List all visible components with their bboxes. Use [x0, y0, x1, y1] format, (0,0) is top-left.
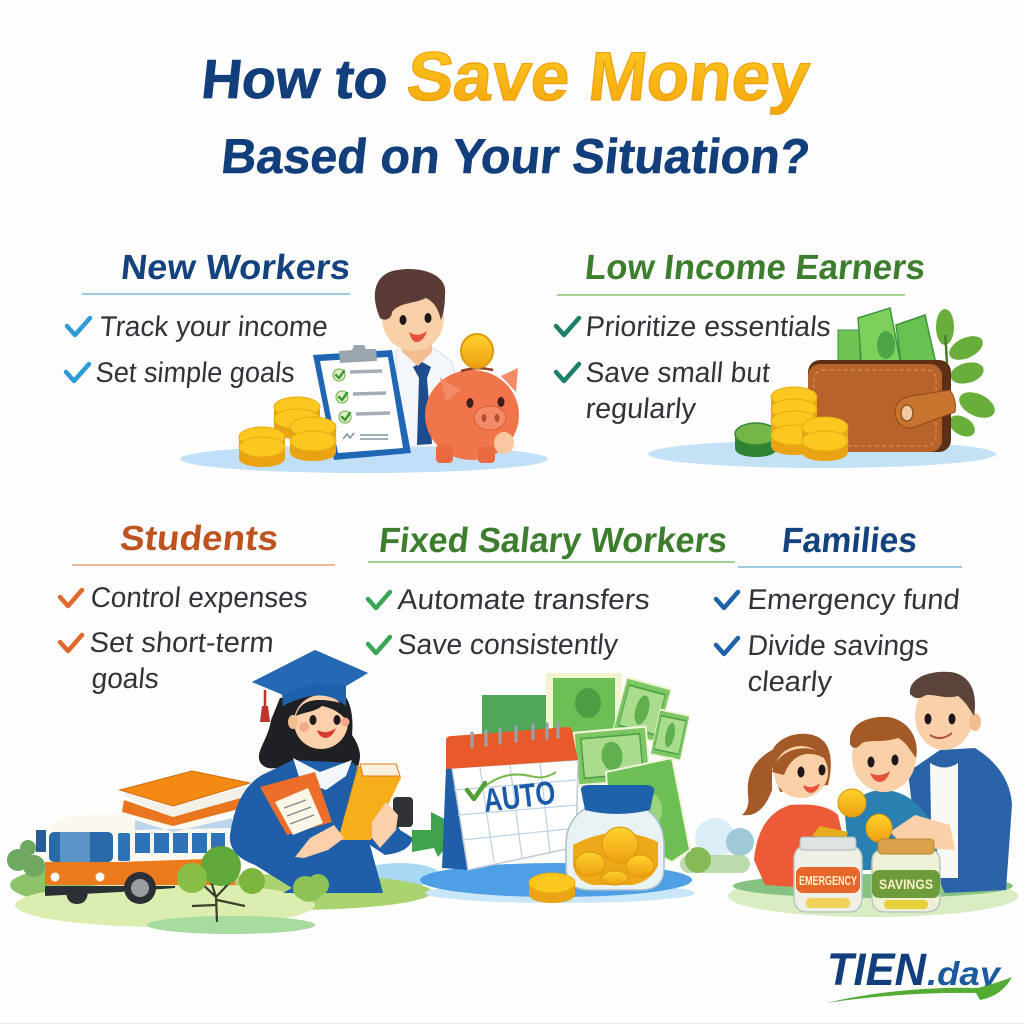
- books held: [260, 772, 332, 835]
- tips: low income earners: Prioritize essentials: [584, 311, 832, 343]
- emergency jar: [794, 826, 862, 912]
- bush: [293, 876, 317, 900]
- heading: low income earners: Low Income Earners: [583, 248, 927, 287]
- wallet: [808, 360, 955, 452]
- title: [199, 37, 814, 184]
- tips: new workers: [66, 311, 329, 389]
- panel: families: [716, 521, 1018, 917]
- calendar label: AUTO: [481, 773, 557, 819]
- heading: students: Students: [118, 519, 280, 558]
- savings jar: SAVINGS: [879, 876, 933, 892]
- cash: [482, 673, 690, 862]
- tips: low income earners: Save small but: [584, 357, 771, 389]
- illustration: family saving in jars: [728, 672, 1018, 917]
- loose coin: [529, 873, 575, 903]
- heading: new workers: New Workers: [119, 248, 352, 287]
- calendar: [442, 723, 578, 870]
- piggy bank: [425, 334, 519, 463]
- robe: [230, 760, 413, 893]
- boy: [838, 717, 955, 870]
- tips: students: [60, 582, 309, 695]
- panel: students: [7, 519, 440, 934]
- bus: [36, 813, 235, 904]
- tips: students: Set short-term: [88, 627, 275, 659]
- logo: [826, 944, 1012, 1003]
- tips: fixed salary workers: Save consistently: [396, 629, 620, 661]
- background shrubs: [680, 818, 754, 873]
- tips: students: goals: [90, 663, 160, 695]
- tips: low income earners: regularly: [584, 393, 698, 425]
- logo: TIEN: [827, 944, 927, 995]
- clipboard: [313, 345, 411, 460]
- panel: new workers: [66, 248, 548, 473]
- father's hand and coin: [890, 815, 955, 850]
- logo: .day: [927, 955, 1002, 992]
- tips: families: [716, 584, 961, 698]
- illustration: wallet with cash: [648, 308, 999, 468]
- tips: new workers: Track your income: [98, 311, 329, 343]
- cash: [838, 308, 937, 372]
- emergency jar: EMERGENCY: [799, 873, 857, 888]
- title line 1: [199, 37, 814, 115]
- tips: new workers: Set simple goals: [94, 357, 296, 389]
- title line 1: Save Money: [403, 37, 814, 115]
- arrow: [412, 812, 462, 857]
- stacked books: [120, 771, 250, 832]
- bushes: [7, 840, 45, 877]
- jar of coins: [566, 785, 664, 890]
- tips: fixed salary workers: [368, 584, 651, 661]
- cap: [252, 650, 368, 706]
- tree: [177, 846, 323, 922]
- illustration: automatic savings calendar and jar: [412, 673, 754, 903]
- leaves: [936, 309, 999, 441]
- panel: low income earners: [556, 248, 999, 468]
- tips: families: Emergency fund: [746, 584, 961, 616]
- graduate: [230, 650, 413, 900]
- title line 2: Based on Your Situation?: [219, 130, 813, 184]
- illustration: student, books and bus: [7, 650, 440, 934]
- hair back: [259, 692, 360, 768]
- coin stacks: [239, 397, 336, 467]
- heading: families: Families: [780, 521, 919, 560]
- savings jar: [872, 839, 940, 912]
- father: [908, 672, 1012, 893]
- hands: [295, 825, 344, 858]
- panel: fixed salary workers: [368, 521, 754, 903]
- illustration: worker with piggy bank: [180, 269, 548, 473]
- worker: [375, 269, 460, 447]
- girl: [742, 734, 846, 887]
- tips: families: clearly: [746, 666, 834, 698]
- tips: fixed salary workers: Automate transfers: [396, 584, 651, 616]
- tips: students: Control expenses: [89, 582, 309, 614]
- title line 1: How to: [199, 48, 391, 110]
- tips: families: Divide savings: [746, 630, 930, 662]
- heading: fixed salary workers: Fixed Salary Workers: [377, 521, 729, 560]
- face: [294, 695, 348, 749]
- coins: [735, 387, 848, 461]
- tips: low income earners: [556, 311, 832, 425]
